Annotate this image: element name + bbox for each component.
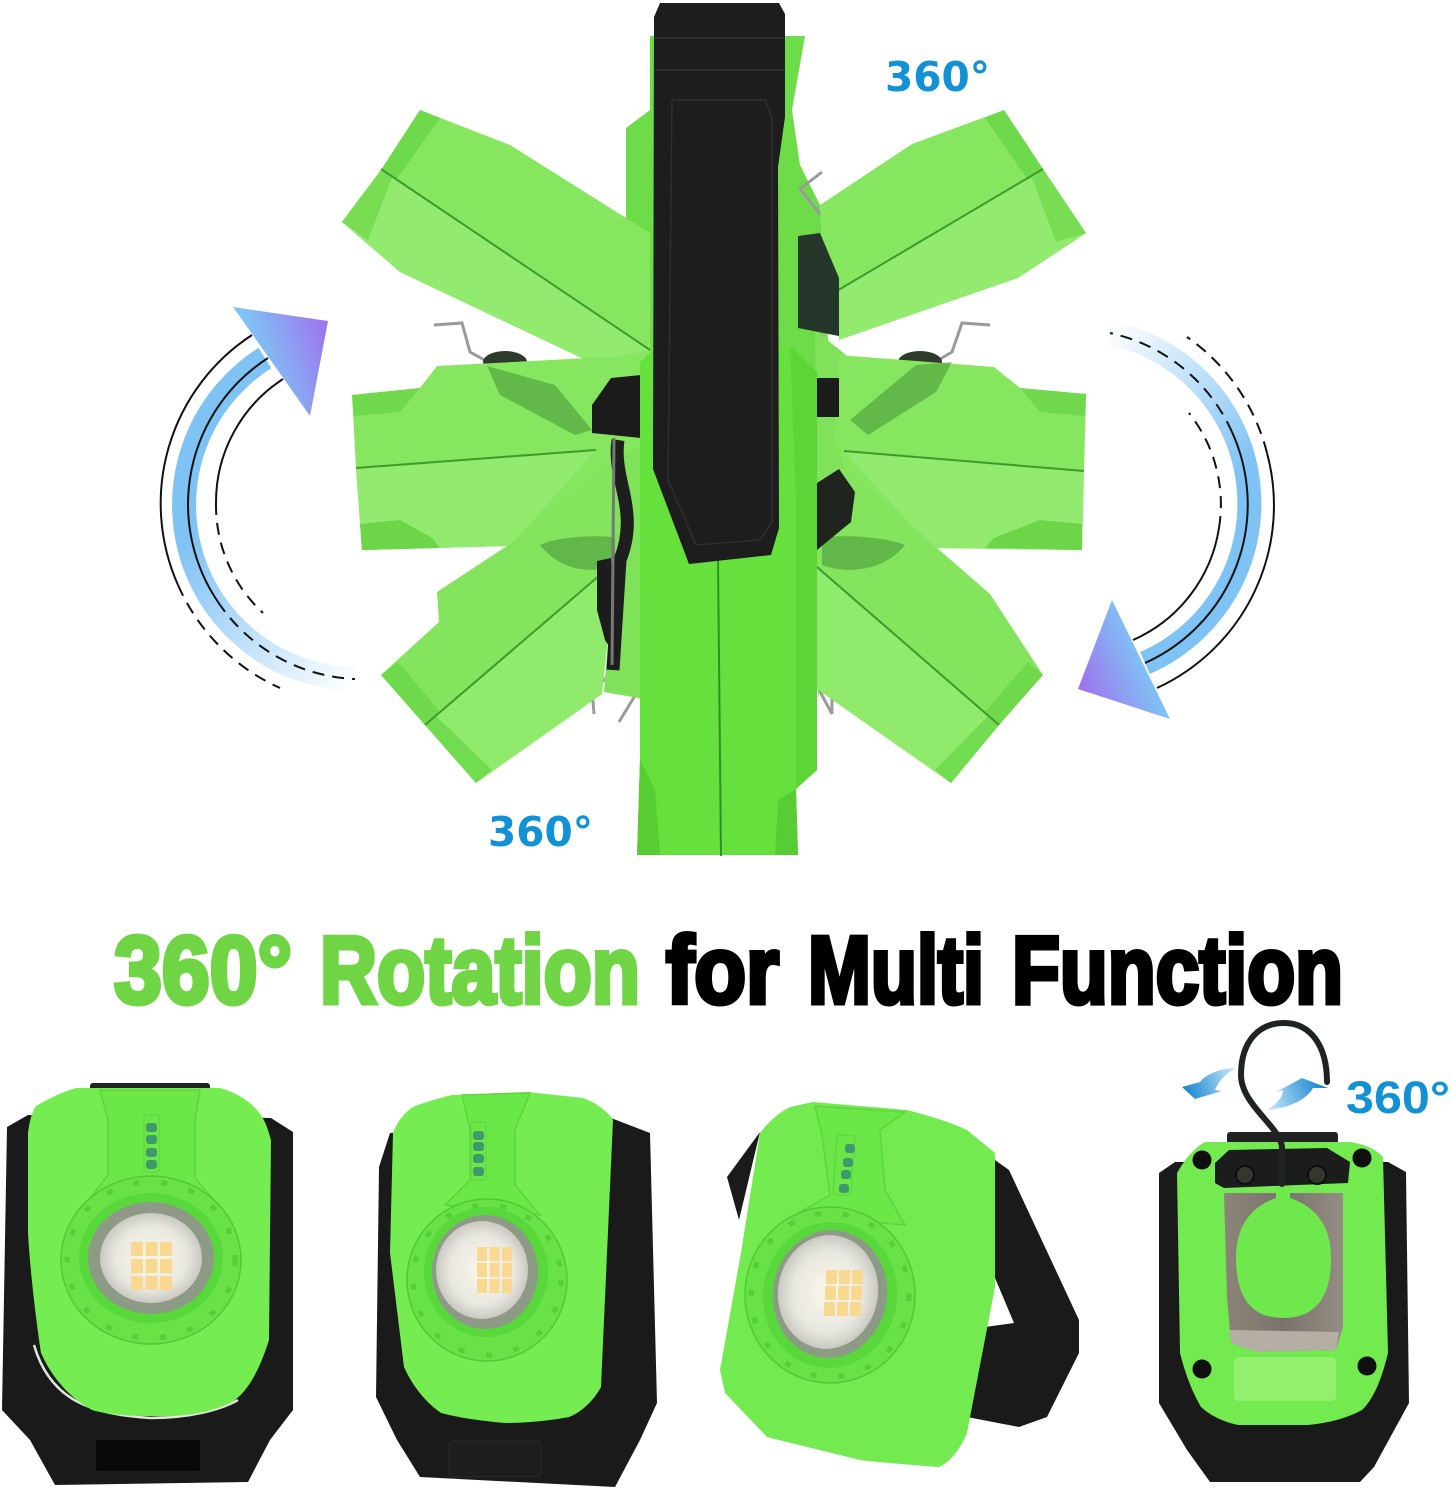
lamp 2 green shell bbox=[390, 1092, 613, 1423]
lamp 3 green shell bbox=[720, 1102, 995, 1467]
right arrow solid lines bbox=[1133, 432, 1274, 688]
right black upper bracket bbox=[805, 378, 839, 417]
translucent overlap shadows bbox=[487, 362, 952, 570]
lamp 3 top channel bbox=[795, 1106, 905, 1225]
dark blobs behind arms bbox=[483, 351, 942, 373]
left black lower strap bbox=[597, 558, 618, 660]
lamp 3 battery indicator bbox=[833, 1134, 855, 1196]
lamp 3: stand view bbox=[720, 1102, 1079, 1467]
right arrow head bbox=[1078, 600, 1170, 719]
title word for: for bbox=[666, 917, 779, 1024]
arm: lower right bbox=[817, 467, 1043, 783]
lamp 1 label plate bbox=[96, 1440, 200, 1471]
title word Function: Function bbox=[1012, 917, 1343, 1024]
arm: lower left bbox=[381, 461, 612, 783]
lamp 4: back view with hook bbox=[1159, 1023, 1450, 1482]
lamp 3 black stand bbox=[967, 1155, 1079, 1427]
black handle bbox=[653, 3, 785, 564]
lamp 1 battery indicator bbox=[144, 1115, 159, 1172]
title word 360°: 360° bbox=[114, 917, 292, 1024]
label: 360° top right: 360° bbox=[885, 53, 990, 101]
lamp 4 metal clip bbox=[1224, 1193, 1343, 1352]
title bbox=[114, 917, 1343, 1024]
lamp 4 black plate bbox=[1215, 1148, 1350, 1188]
lamp 1 LED chips bbox=[131, 1242, 172, 1290]
lamp 1 top channel bbox=[85, 1090, 218, 1205]
lamp 3 left tab bbox=[727, 1132, 760, 1220]
arm: upper left bbox=[342, 110, 650, 362]
right black lower bracket bbox=[817, 469, 855, 550]
lamp 1 top nub bbox=[90, 1083, 210, 1091]
upper right black tab bbox=[798, 233, 839, 336]
left arrow band bbox=[184, 358, 355, 679]
title word Multi: Multi bbox=[808, 917, 984, 1024]
rotation arrow left curl bbox=[1182, 1068, 1236, 1099]
lamp 2 LED chips bbox=[477, 1247, 512, 1293]
lamp 2 black stand bbox=[376, 1118, 657, 1487]
lamp 4 hook bbox=[1241, 1023, 1327, 1184]
lamp 4 top nub bbox=[1227, 1132, 1338, 1144]
lamp 2 label plate bbox=[449, 1441, 541, 1477]
arm: left horizontal bbox=[352, 355, 650, 550]
arm: right horizontal bbox=[835, 355, 1086, 550]
right rotation arrow bbox=[1078, 333, 1274, 719]
left arrow solid lines bbox=[161, 335, 283, 602]
lamp 2 battery indicator bbox=[471, 1122, 486, 1180]
lamp 4 green shell bbox=[1177, 1142, 1388, 1425]
back green body top bbox=[626, 36, 830, 370]
green backfill near right of body bbox=[815, 330, 846, 700]
lamp 2: angled view bbox=[376, 1092, 657, 1487]
lamp 4 black stand bbox=[1159, 1162, 1409, 1482]
green backfill near left of body bbox=[590, 340, 650, 700]
lamp 4 clip cutout bbox=[1236, 1183, 1331, 1318]
left black bracket bbox=[592, 375, 641, 438]
arm: upper right bbox=[820, 110, 1086, 345]
center green body bbox=[637, 345, 817, 856]
lamp 2 lens assembly bbox=[407, 1199, 567, 1361]
left black hook strap bbox=[613, 440, 627, 670]
lamp 1 white edge bbox=[34, 1345, 238, 1418]
lamp 4 screws bbox=[1236, 1166, 1326, 1184]
right arrow band bbox=[1110, 333, 1249, 663]
right arrow dashed lines bbox=[1110, 333, 1267, 528]
lamp 1 green shell bbox=[28, 1088, 271, 1416]
lamp 1: front view bbox=[2, 1083, 293, 1485]
lamp 1 lens assembly bbox=[61, 1176, 241, 1344]
metal clips bbox=[434, 172, 990, 722]
left arrow head bbox=[233, 307, 328, 416]
rotation arrow right curl bbox=[1266, 1078, 1328, 1110]
lamp 1 black stand bbox=[2, 1115, 293, 1485]
lamp 4 mounting holes bbox=[1192, 1148, 1376, 1378]
lamp 3 lens assembly bbox=[745, 1207, 915, 1383]
left metal rod bbox=[612, 438, 614, 665]
left rotation arrow bbox=[161, 307, 355, 688]
rotating lamp group bbox=[342, 3, 1086, 856]
lamp 4 metal lip bbox=[1229, 1330, 1339, 1352]
title word Rotation: Rotation bbox=[320, 917, 640, 1024]
label: 360° hook: 360° bbox=[1346, 1072, 1450, 1123]
left arrow dashed lines bbox=[178, 503, 355, 688]
lamp 2 top channel bbox=[445, 1093, 540, 1215]
label: 360° bottom left: 360° bbox=[488, 808, 593, 856]
lamp 3 LED chips bbox=[824, 1270, 863, 1316]
lamp 4 label area bbox=[1234, 1357, 1336, 1401]
